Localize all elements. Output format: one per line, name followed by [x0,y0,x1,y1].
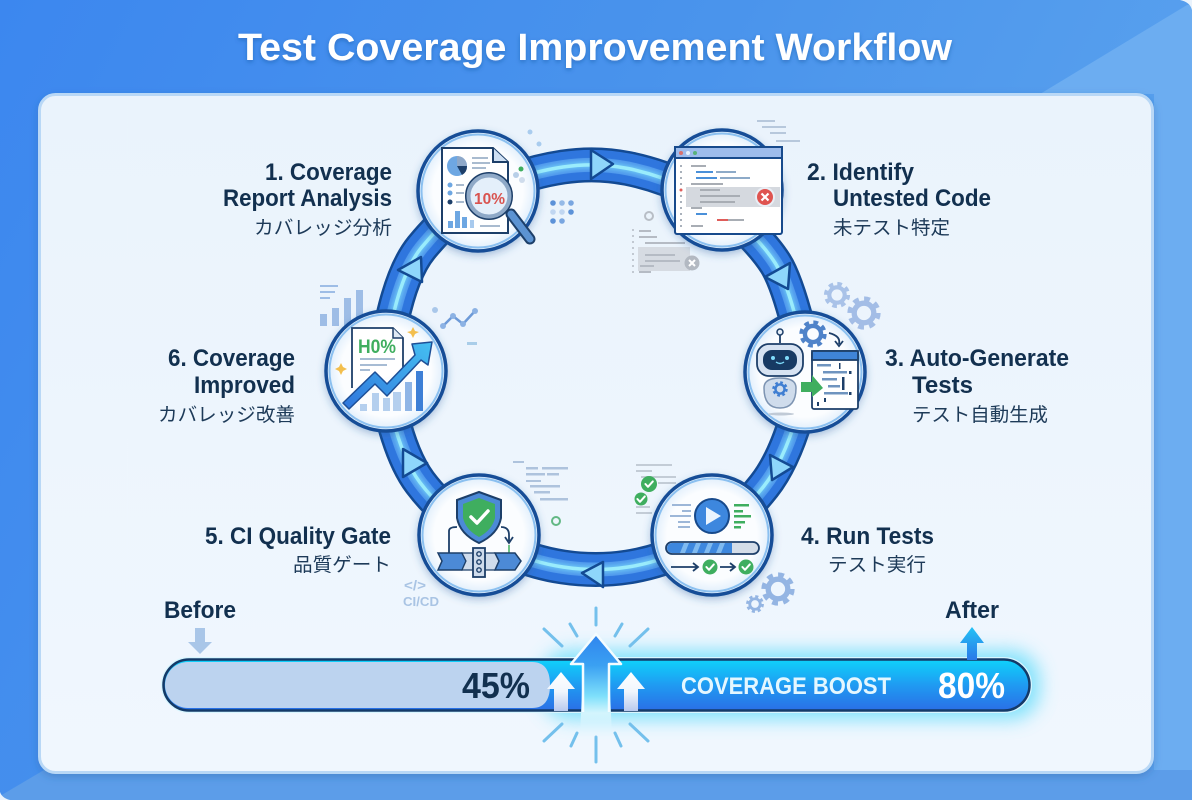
icon: shield and gate pipeline [438,492,521,577]
icon: report with magnifier: 10% [474,191,505,208]
before label: Before [164,597,236,624]
label: step 2: 未テスト特定 [833,217,950,239]
label: step 4: テスト実行 [828,554,926,576]
before arrow [188,628,212,654]
label: step 3: 3. Auto-Generate [885,345,1069,372]
step 5 node: CI quality gate [419,475,539,595]
label: step 4: 4. Run Tests [801,523,934,550]
before value: 45% [462,665,530,706]
icon: robot generating test code [757,322,858,416]
label: step 4 [801,523,934,576]
step 3 node: auto-generate tests [745,312,865,432]
label: step 3: テスト自動生成 [912,404,1048,426]
after arrow [960,627,984,660]
main panel [40,94,1152,772]
coverage progress bar [164,650,1040,720]
after value: 80% [938,665,1005,706]
label: step 3: Tests [912,372,973,399]
boost arrows and rays [544,608,648,762]
label: step 5 [205,523,391,576]
label: step 6: Improved [194,372,295,399]
label: step 6 [158,345,295,426]
flow arrows on ring [398,150,793,587]
icon: code window with error [675,147,782,234]
decorative background details [320,120,878,612]
step 6 node: coverage improved [326,311,446,431]
label: step 3 [885,345,1069,426]
icon: play button with progress [666,499,759,574]
label: step 2: 2. Identify [807,159,915,186]
label: step 6: カバレッジ改善 [158,404,295,426]
label: step 2: Untested Code [833,185,991,212]
label: step 1: 1. Coverage [265,159,392,186]
label: step 5: 5. CI Quality Gate [205,523,391,550]
bar caption: COVERAGE BOOST [681,673,891,700]
label: step 2 [807,159,991,239]
after label: After [945,597,999,624]
workflow ring [386,165,804,570]
icon: rising chart with report: H0% [358,337,396,358]
label: step 1: Report Analysis [223,185,392,212]
label: step 6: 6. Coverage [168,345,295,372]
decorative background details: </> [404,577,426,593]
label: step 5: 品質ゲート [293,554,391,576]
step 1 node: coverage report analysis [418,131,538,251]
step 2 node: identify untested code [662,130,782,250]
label: step 1 [223,159,392,239]
label: step 1: カバレッジ分析 [254,217,392,239]
title: Test Coverage Improvement Workflow [238,27,952,69]
decorative background details: CI/CD [403,594,439,609]
step 4 node: run tests [652,475,772,595]
